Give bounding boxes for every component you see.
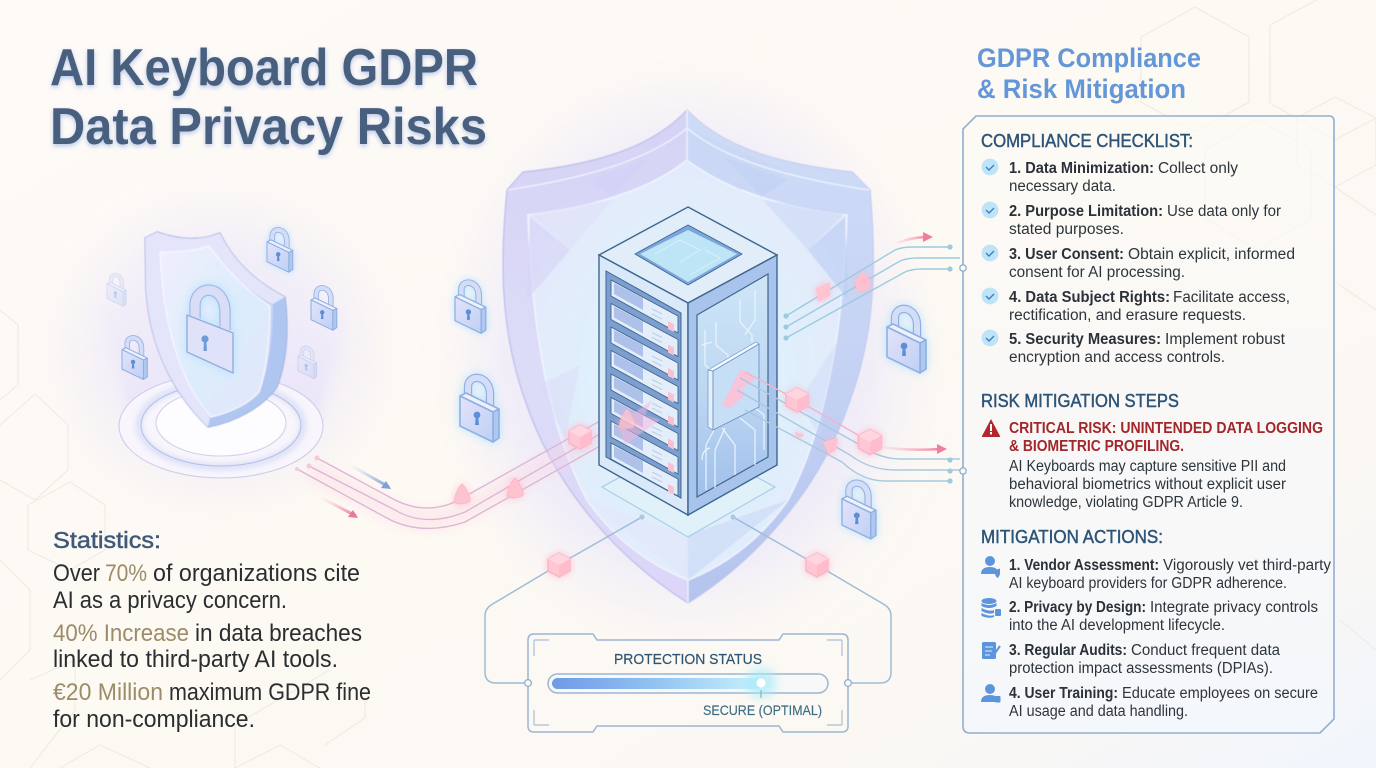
shield body bbox=[145, 232, 287, 427]
chip bbox=[708, 342, 759, 430]
connector: status left bbox=[485, 514, 645, 683]
icon: vendor user shield bbox=[981, 556, 1000, 578]
stat: 70 percent bbox=[53, 560, 360, 614]
critical risk callout: knowledge, violating GDPR Article 9. bbox=[1009, 494, 1243, 511]
checklist item 5 bbox=[1009, 331, 1286, 366]
corner brackets bbox=[534, 640, 842, 725]
central floating locks bbox=[455, 283, 926, 539]
connector nodes bbox=[525, 680, 851, 686]
action item 3 bbox=[1009, 642, 1280, 677]
data dots right upper bbox=[783, 244, 953, 341]
statistics heading: Statistics: bbox=[53, 527, 161, 553]
icon: database lock bbox=[982, 598, 1001, 618]
central shield halo bbox=[433, 55, 943, 655]
shield facets bbox=[527, 128, 848, 580]
action item 2 bbox=[1009, 599, 1318, 634]
checklist item 3: Obtain explicit, informed bbox=[1128, 246, 1295, 263]
action item 4: Educate employees on secure bbox=[1122, 685, 1318, 702]
highlight lines bbox=[508, 110, 869, 603]
checklist item 1 bbox=[1009, 160, 1238, 195]
action item 2: 2. Privacy by Design: bbox=[1009, 599, 1146, 616]
checklist item 5: encryption and access controls. bbox=[1009, 349, 1225, 366]
right half shading bbox=[687, 110, 873, 603]
icon: audit clipboard bbox=[982, 642, 1000, 659]
compliance checklist heading: COMPLIANCE CHECKLIST: bbox=[981, 131, 1193, 151]
icon: warning triangle bbox=[982, 419, 1000, 437]
flow arrows left bbox=[320, 465, 391, 518]
right face panel bbox=[697, 274, 768, 497]
left face bbox=[599, 255, 688, 515]
stat: 40 percent bbox=[53, 620, 362, 673]
protection status widget bbox=[525, 634, 851, 732]
icon: user training bbox=[981, 684, 1000, 702]
critical risk callout: behavioral biometrics without explicit user bbox=[1009, 476, 1286, 493]
checklist icons bbox=[982, 159, 998, 346]
base plate bbox=[602, 440, 775, 537]
title bbox=[50, 39, 487, 156]
compliance panel bbox=[960, 116, 1334, 733]
concentric rings bbox=[119, 374, 323, 478]
critical risk callout: CRITICAL RISK: UNINTENDED DATA LOGGING bbox=[1009, 420, 1323, 437]
action item 2: into the AI development lifecycle. bbox=[1009, 617, 1225, 634]
right face bbox=[688, 255, 777, 515]
circuit traces bbox=[702, 290, 764, 490]
panel frame bbox=[963, 116, 1334, 733]
statistics block bbox=[53, 527, 371, 733]
checklist item 4: 4. Data Subject Rights: bbox=[1009, 289, 1170, 306]
action item 4 bbox=[1009, 685, 1318, 720]
action item 4: 4. User Training: bbox=[1009, 685, 1118, 702]
critical risk callout: & BIOMETRIC PROFILING. bbox=[1009, 438, 1184, 455]
checklist item 1: necessary data. bbox=[1009, 178, 1116, 195]
status label: PROTECTION STATUS bbox=[614, 651, 762, 668]
action item 1: Vigorously vet third-party bbox=[1163, 557, 1331, 574]
checklist item 3 bbox=[1009, 246, 1295, 281]
data lines: right upper bbox=[786, 247, 960, 338]
large central shield bbox=[503, 110, 873, 603]
title: Data Privacy Risks bbox=[50, 98, 487, 156]
floating locks bbox=[107, 230, 337, 380]
chip pink pattern bbox=[722, 370, 755, 408]
data packets right upper bbox=[816, 272, 870, 302]
data dots right lower bbox=[947, 457, 953, 484]
checklist item 3: consent for AI processing. bbox=[1009, 264, 1185, 281]
server units bbox=[611, 280, 678, 496]
critical risk callout: AI Keyboards may capture sensitive PII and bbox=[1009, 458, 1286, 475]
checklist item 3: 3. User Consent: bbox=[1009, 246, 1124, 263]
stat: 70 percent: AI as a privacy concern. bbox=[53, 587, 287, 614]
action item 3: 3. Regular Audits: bbox=[1009, 642, 1127, 659]
panel nodes bbox=[960, 265, 966, 474]
connector packets bbox=[548, 553, 828, 577]
stat: 40 percent: linked to third-party AI tools. bbox=[53, 646, 338, 673]
rack inset bbox=[606, 271, 681, 498]
action item 4: AI usage and data handling. bbox=[1009, 703, 1188, 720]
checklist item 2: 2. Purpose Limitation: bbox=[1009, 203, 1163, 220]
checklist item 2: Use data only for bbox=[1167, 203, 1281, 220]
action item 1: AI keyboard providers for GDPR adherence. bbox=[1009, 575, 1287, 592]
connector: status right bbox=[730, 514, 891, 683]
action item 3: Conduct frequent data bbox=[1131, 642, 1280, 659]
checklist item 2 bbox=[1009, 203, 1281, 238]
stat: 40 percent: 40% Increase bbox=[53, 620, 189, 647]
critical risk callout bbox=[1009, 420, 1323, 511]
right heading bbox=[977, 43, 1201, 104]
checklist item 4: rectification, and erasure requests. bbox=[1009, 307, 1246, 324]
data packets right lower bbox=[786, 388, 882, 455]
data packets left bbox=[454, 425, 591, 504]
title: AI Keyboard GDPR bbox=[50, 39, 478, 97]
left shield illustration bbox=[90, 230, 350, 478]
checklist item 5: Implement robust bbox=[1165, 331, 1286, 348]
data lines: right lower bbox=[737, 372, 960, 481]
server rack bbox=[599, 207, 777, 515]
action item 1: 1. Vendor Assessment: bbox=[1009, 557, 1159, 574]
stat: 20 million bbox=[53, 679, 371, 733]
stat: 20 million: maximum GDPR fine bbox=[169, 679, 371, 706]
checklist item 1: 1. Data Minimization: bbox=[1009, 160, 1154, 177]
stat: 20 million: for non-compliance. bbox=[53, 706, 255, 733]
stat: 70 percent: 70% bbox=[105, 560, 147, 587]
right heading: GDPR Compliance bbox=[977, 43, 1201, 73]
checklist item 4 bbox=[1009, 289, 1290, 324]
data dots left bbox=[295, 456, 320, 471]
top face bbox=[599, 207, 777, 303]
action item 3: protection impact assessments (DPIAs). bbox=[1009, 660, 1273, 677]
secure label: SECURE (OPTIMAL) bbox=[703, 702, 822, 718]
left soft glow bbox=[80, 220, 360, 480]
risk mitigation heading: RISK MITIGATION STEPS bbox=[981, 391, 1179, 411]
action item 2: Integrate privacy controls bbox=[1150, 599, 1318, 616]
checklist item 1: Collect only bbox=[1158, 160, 1238, 177]
right heading: & Risk Mitigation bbox=[977, 74, 1186, 104]
checklist item 5: 5. Security Measures: bbox=[1009, 331, 1161, 348]
data lines: left inbound bbox=[297, 397, 655, 528]
stat: 20 million: €20 Million bbox=[53, 679, 163, 706]
stat: 70 percent: Over bbox=[53, 560, 100, 587]
projection beam bbox=[90, 300, 350, 440]
inbound overlay on rack bbox=[618, 400, 660, 445]
stat: 40 percent: in data breaches bbox=[195, 620, 362, 647]
stat: 70 percent: of organizations cite bbox=[153, 560, 360, 587]
action item 1 bbox=[1009, 557, 1331, 592]
arrow outbound lower bbox=[883, 444, 947, 454]
pink haze under left lines bbox=[310, 405, 650, 520]
arrow outbound upper bbox=[897, 232, 933, 243]
status bar bbox=[548, 668, 828, 698]
central lock bbox=[187, 290, 233, 373]
mitigation actions heading: MITIGATION ACTIONS: bbox=[981, 527, 1163, 547]
top screen bbox=[635, 225, 742, 285]
inner face bbox=[528, 160, 847, 580]
checklist item 2: stated purposes. bbox=[1009, 221, 1124, 238]
checklist item 4: Facilitate access, bbox=[1173, 289, 1290, 306]
